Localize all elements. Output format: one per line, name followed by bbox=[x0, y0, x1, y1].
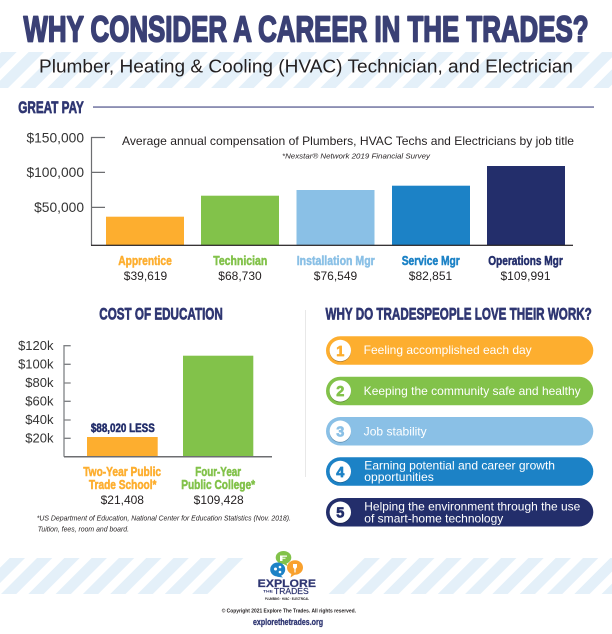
section heading: cost of education: COST OF EDUCATION bbox=[99, 306, 223, 324]
bar: public college bbox=[183, 356, 253, 456]
bar label: service manager: Service Mgr bbox=[402, 253, 460, 268]
website: explorethetrades.org bbox=[253, 617, 323, 627]
bar label: service manager: $82,851 bbox=[409, 269, 453, 283]
icon: green bubble bbox=[276, 551, 291, 566]
reason 2 bbox=[326, 377, 593, 405]
y axis labels: $60k bbox=[25, 394, 54, 408]
bar label: operations manager: $109,991 bbox=[500, 269, 551, 283]
reason 4: opportunities bbox=[364, 470, 434, 484]
bar label: operations manager bbox=[488, 253, 563, 283]
y axis labels: $100,000 bbox=[26, 165, 84, 180]
survey source note: *Nexstar® Network 2019 Financial Survey bbox=[282, 152, 431, 160]
bar label: operations manager: Operations Mgr bbox=[488, 253, 563, 268]
bar label: apprentice bbox=[118, 253, 172, 283]
bar label: public college bbox=[181, 464, 256, 507]
bar label: technician: Technician bbox=[213, 253, 267, 268]
logo: Explore the Trades: THE bbox=[263, 588, 273, 594]
bar label: apprentice: Apprentice bbox=[118, 253, 172, 268]
bar label: trade school bbox=[83, 464, 161, 507]
y axis labels: $80k bbox=[25, 375, 54, 390]
education source footnote: Tuition, fees, room and board. bbox=[38, 524, 129, 534]
reason 2: Keeping the community safe and healthy bbox=[364, 384, 581, 398]
reason 5: of smart-home technology bbox=[364, 512, 503, 526]
bar label: apprentice: $39,619 bbox=[124, 269, 168, 283]
subtitle: Plumber, Heating & Cooling (HVAC) Technician, and Electrician bbox=[39, 56, 573, 76]
icon: orange bubble bbox=[287, 560, 303, 578]
striped header band bbox=[0, 52, 612, 88]
y axis labels: $120k bbox=[18, 338, 54, 353]
striped footer band: left bbox=[0, 558, 246, 594]
reason 3: Job stability bbox=[364, 424, 427, 438]
education source footnote bbox=[37, 514, 291, 534]
callout: savings: $88,020 LESS bbox=[91, 421, 155, 435]
bar label: technician bbox=[213, 253, 267, 283]
reason 5: 5 bbox=[336, 506, 344, 522]
reason 5 bbox=[326, 498, 593, 526]
y axis labels: $40k bbox=[25, 412, 54, 427]
reason 3 bbox=[326, 417, 593, 446]
bar chart: annual compensation bbox=[26, 130, 574, 283]
y axis labels: $100k bbox=[18, 356, 54, 372]
bar label: technician: $68,730 bbox=[218, 269, 262, 283]
list: reasons bbox=[326, 336, 593, 526]
logo: Explore the Trades: TRADES bbox=[274, 587, 309, 596]
y axis labels bbox=[18, 338, 54, 446]
section heading: great pay: GREAT PAY bbox=[18, 99, 84, 117]
bar label: service manager bbox=[402, 253, 460, 283]
logo: Explore the Trades bbox=[258, 551, 316, 601]
reason 3: 3 bbox=[336, 424, 344, 440]
logo: Explore the Trades: PLUMBING · HVAC · ELECTRICAL bbox=[265, 597, 309, 601]
bar label: trade school: Trade School* bbox=[89, 477, 157, 492]
logo wordmark: EXPLORE bbox=[258, 578, 316, 590]
icon: blue bubble bbox=[270, 562, 285, 578]
bar label: installation manager: Installation Mgr bbox=[297, 253, 375, 268]
bar label: trade school: $21,408 bbox=[101, 493, 144, 507]
reason 4: Earning potential and career growth bbox=[364, 458, 555, 472]
chart caption: Average annual compensation of Plumbers, HVAC Techs and Electricians by job title bbox=[122, 135, 574, 148]
bar label: installation manager bbox=[297, 253, 375, 283]
y axis labels: $20k bbox=[25, 430, 54, 446]
y axis labels: $150,000 bbox=[26, 130, 84, 146]
reason 4: 4 bbox=[336, 465, 344, 481]
reason 1: 1 bbox=[336, 344, 344, 360]
bar label: public college: $109,428 bbox=[194, 493, 244, 507]
education source footnote: *US Department of Education, National Center for Education Statistics (Nov. 2018). bbox=[37, 514, 291, 522]
bar chart: cost of education bbox=[18, 338, 291, 534]
reason 5: Helping the environment through the use bbox=[364, 500, 581, 514]
striped footer band: right bbox=[328, 558, 612, 594]
reason 2: 2 bbox=[336, 384, 344, 400]
bar: trade school bbox=[87, 437, 158, 456]
copyright: © Copyright 2021 Explore The Trades. All rights reserved. bbox=[222, 608, 356, 614]
bar label: trade school: Two-Year Public bbox=[83, 464, 161, 479]
bar label: public college: Four-Year bbox=[195, 464, 241, 479]
y axis labels bbox=[26, 130, 84, 215]
reason 1 bbox=[326, 336, 593, 365]
reason 1: Feeling accomplished each day bbox=[364, 343, 532, 357]
bars bbox=[106, 166, 565, 245]
y axis labels: $50,000 bbox=[34, 200, 84, 215]
bar label: installation manager: $76,549 bbox=[314, 269, 358, 283]
reason 4 bbox=[326, 457, 593, 486]
bar label: public college: Public College* bbox=[181, 477, 256, 492]
